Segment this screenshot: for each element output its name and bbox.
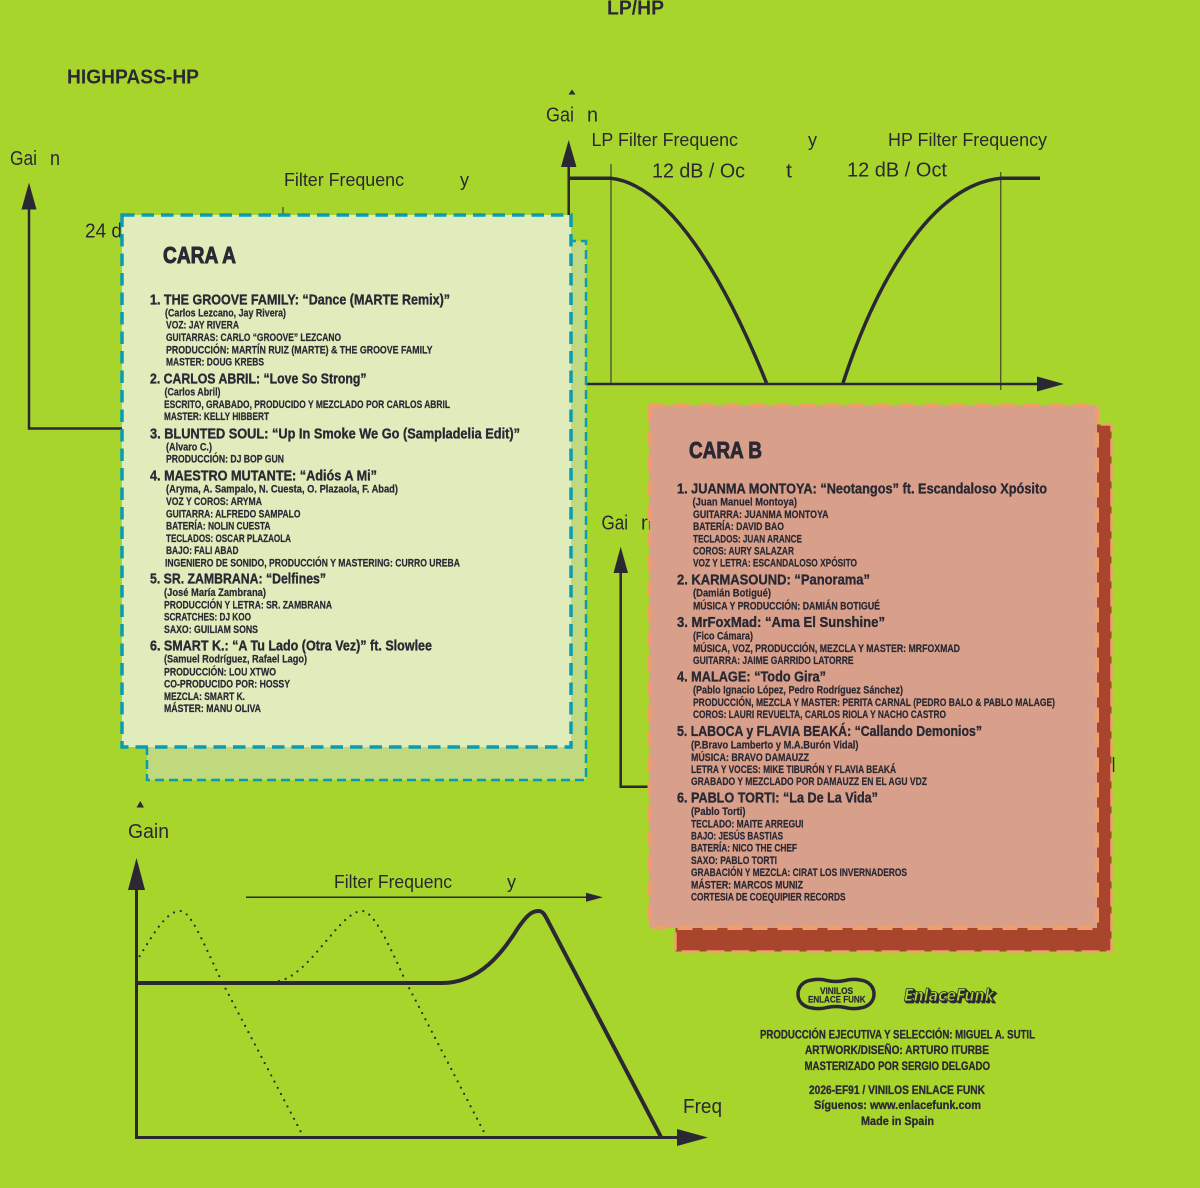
heading: Cara A: CARA A [163, 242, 236, 268]
heading: Cara B: CARA B [689, 437, 762, 463]
track A1: MASTER: DOUG KREBS [166, 356, 264, 368]
track B6 [677, 790, 907, 903]
track A6: MÁSTER: MANU OLIVA [164, 702, 261, 715]
track A1: VOZ: JAY RIVERA [166, 319, 239, 331]
track B2: MÚSICA Y PRODUCCIÓN: DAMIÁN BOTIGUÉ [693, 599, 880, 612]
track A6: PRODUCCIÓN: LOU XTWO [164, 665, 276, 678]
label: filter frequency [284, 170, 469, 190]
chart: third filter behind Cara B [602, 512, 1114, 787]
arrow: highpass y axis [22, 182, 125, 428]
track A5: (José María Zambrana) [164, 587, 266, 599]
label: filter frequency: Filter Frequenc [284, 170, 404, 190]
track B1: GUITARRA: JUANMA MONTOYA [693, 509, 829, 521]
track B6: BAJO: JESÚS BASTIAS [691, 829, 783, 842]
track A5: SCRATCHES: DJ KOO [164, 611, 251, 623]
track A6: 6. SMART K.: “A Tu Lado (Otra Vez)” ft. Slowlee [150, 638, 432, 654]
track A1 [150, 292, 450, 368]
track A3: PRODUCCIÓN: DJ BOP GUN [166, 452, 284, 465]
curve: highpass response [843, 178, 1040, 383]
track A2: (Carlos Abril) [164, 386, 221, 398]
y axis label: Gain: n [50, 148, 60, 170]
label: Freq: Freq [683, 1096, 722, 1118]
track B4: 4. MALAGE: “Todo Gira” [677, 669, 826, 685]
track A6 [150, 638, 432, 715]
credits [760, 1026, 1035, 1073]
track A1: (Carlos Lezcano, Jay Rivera) [165, 307, 286, 319]
track B4: COROS: LAURI REVUELTA, CARLOS RIOLA Y NACHO CASTRO [693, 709, 946, 721]
track B5: 5. LABOCA y FLAVIA BEAKÁ: “Callando Demonios” [677, 723, 982, 740]
track B1: COROS: AURY SALAZAR [693, 545, 794, 557]
label: filter frequency: y [507, 872, 516, 892]
arrow: resonant y axis [128, 858, 145, 1138]
logo: Vinilos Enlace Funk: ENLACE FUNK [808, 994, 866, 1004]
catalogue info: 2026-EF91 / VINILOS ENLACE FUNK [809, 1083, 985, 1097]
track B3: GUITARRA: JAIME GARRIDO LATORRE [693, 655, 854, 667]
y axis label: Gain: Gai [546, 104, 574, 126]
y axis label: Gain [546, 104, 598, 126]
track A4: (Aryma, A. Sampalo, N. Cuesta, O. Plazaola, F. Abad) [166, 483, 398, 495]
track B6: BATERÍA: NICO THE CHEF [691, 841, 797, 854]
track B2: 2. KARMASOUND: “Panorama” [677, 572, 870, 588]
icon: small triangle [136, 801, 144, 808]
track B6: (Pablo Torti) [691, 806, 746, 818]
track B3: 3. MrFoxMad: “Ama El Sunshine” [677, 615, 885, 631]
track B5: (P.Bravo Lamberto y M.A.Burón Vidal) [691, 739, 859, 751]
label: LP slope [652, 161, 792, 183]
panel: Cara B shadow [676, 424, 1112, 952]
track A3: 3. BLUNTED SOUL: “Up In Smoke We Go (Sampladelia Edit)” [150, 426, 520, 442]
track B6: GRABACIÓN Y MEZCLA: CIRAT LOS INVERNADEROS [691, 866, 907, 879]
y axis label: Gain: n [587, 104, 598, 126]
track B1: TECLADOS: JUAN ARANCE [693, 533, 802, 545]
y axis label: Gain: Gai [602, 512, 628, 534]
track A1: PRODUCCIÓN: MARTÍN RUIZ (MARTE) & THE GROOVE FAMILY [166, 343, 433, 356]
arrow: resonant x axis [135, 1129, 708, 1146]
track B4: PRODUCCIÓN, MEZCLA Y MASTER: PERITA CARNAL (PEDRO BALO & PABLO MALAGE) [693, 696, 1055, 709]
track A4: GUITARRA: ALFREDO SAMPALO [166, 508, 301, 520]
credits: ARTWORK/DISEÑO: ARTURO ITURBE [805, 1042, 989, 1057]
label: LP filter frequency [592, 130, 817, 150]
track A5: 5. SR. ZAMBRANA: “Delfines” [150, 571, 326, 587]
track A6: (Samuel Rodríguez, Rafael Lago) [164, 653, 307, 665]
curve: resonant response [136, 911, 661, 1137]
track B5: MÚSICA: BRAVO DAMAUZZ [691, 751, 809, 764]
track A2 [150, 371, 450, 423]
label: LP filter frequency: LP Filter Frequenc [592, 130, 738, 150]
arrow: LP/HP x axis [569, 376, 1064, 392]
curve: swept response 1 (dotted) [136, 911, 302, 1134]
track B6: TECLADO: MAITE ARREGUI [691, 818, 804, 830]
track B5 [677, 723, 982, 788]
credits: MASTERIZADO POR SERGIO DELGADO [804, 1059, 990, 1073]
label: filter frequency: y [460, 170, 469, 190]
y axis label: Gain [602, 512, 652, 534]
track A4 [150, 468, 460, 569]
label: filter frequency [334, 872, 516, 892]
logo: Enlace Funk script: EnlaceFunk [904, 986, 995, 1006]
track A4: BATERÍA: NOLIN CUESTA [166, 519, 271, 532]
curve: lowpass response [569, 178, 766, 383]
label: HP filter frequency: HP Filter Frequency [888, 130, 1047, 150]
label: LP slope: t [786, 161, 792, 183]
track B6: MÁSTER: MARCOS MUNIZ [691, 878, 803, 891]
chart: LP/HP filter [546, 90, 1064, 392]
label: filter frequency: Filter Frequenc [334, 872, 452, 892]
catalogue info [809, 1083, 985, 1128]
y axis label: Gain: Gai [10, 148, 37, 170]
track B4 [677, 669, 1055, 721]
track A2: ESCRITO, GRABADO, PRODUCIDO Y MEZCLADO POR CARLOS ABRIL [164, 399, 450, 411]
track B1: BATERÍA: DAVID BAO [693, 520, 784, 533]
track B5: GRABADO Y MEZCLADO POR DAMAUZZ EN EL AGU VDZ [691, 776, 927, 788]
track B6: CORTESIA DE COEQUIPIER RECORDS [691, 891, 846, 903]
y axis label: Gain: Gain [128, 821, 169, 843]
arrow: frequency sweep [246, 893, 603, 902]
track A3 [150, 426, 520, 465]
label: 24 dB: 24 d [85, 220, 122, 242]
track B1: 1. JUANMA MONTOYA: “Neotangos” ft. Escandaloso Xpósito [677, 481, 1047, 497]
track A4: VOZ Y COROS: ARYMA [166, 496, 262, 508]
track B6: SAXO: PABLO TORTI [691, 855, 777, 867]
track B3: MÚSICA, VOZ, PRODUCCIÓN, MEZCLA Y MASTER: MRFOXMAD [693, 642, 960, 655]
icon: small triangle [568, 90, 576, 94]
logo: Vinilos Enlace Funk [798, 979, 874, 1009]
chart: resonant lowpass filter [128, 801, 722, 1146]
track B4: (Pablo Ignacio López, Pedro Rodríguez Sánchez) [693, 684, 903, 696]
arrow: third chart axes [614, 547, 650, 787]
track A5: PRODUCCIÓN Y LETRA: SR. ZAMBRANA [164, 598, 332, 611]
logo: Vinilos Enlace Funk: VINILOS [820, 986, 853, 996]
title: HIGHPASS-HP: HIGHPASS-HP [67, 66, 199, 88]
track A6: MEZCLA: SMART K. [164, 691, 245, 703]
curve: swept response 2 (dotted) [279, 911, 485, 1134]
track A4: INGENIERO DE SONIDO, PRODUCCIÓN Y MASTERING: CURRO UREBA [165, 556, 460, 569]
track A6: CO-PRODUCIDO POR: HOSSY [164, 678, 291, 690]
panel: Cara A [122, 215, 571, 747]
track A4: BAJO: FALI ABAD [166, 545, 239, 557]
chart: highpass filter [10, 148, 469, 428]
label: LP slope: 12 dB / Oc [652, 161, 745, 183]
track B1 [677, 481, 1047, 569]
track A4: TECLADOS: OSCAR PLAZAOLA [166, 533, 291, 545]
arrow: LP/HP y axis [561, 140, 576, 384]
track B1: (Juan Manuel Montoya) [692, 496, 797, 508]
track A4: 4. MAESTRO MUTANTE: “Adiós A Mi” [150, 468, 377, 484]
label: HP slope: 12 dB / Oct [847, 160, 947, 182]
track A1: 1. THE GROOVE FAMILY: “Dance (MARTE Remix)” [150, 292, 450, 308]
track A1: GUITARRAS: CARLO “GROOVE” LEZCANO [166, 332, 341, 344]
track A3: (Alvaro C.) [166, 441, 212, 453]
track A2: 2. CARLOS ABRIL: “Love So Strong” [150, 371, 366, 387]
track A5 [150, 571, 332, 636]
track B3: (Fico Cámara) [693, 630, 753, 642]
credits: PRODUCCIÓN EJECUTIVA Y SELECCIÓN: MIGUEL A. SUTIL [760, 1026, 1035, 1042]
track B2 [677, 572, 880, 612]
track B3 [677, 615, 960, 667]
track B6: 6. PABLO TORTI: “La De La Vida” [677, 790, 878, 806]
y axis label: Gain: n [641, 512, 652, 534]
track A5: SAXO: GUILIAM SONS [164, 624, 258, 636]
panel: Cara A shadow [147, 241, 586, 780]
panel: Cara B [650, 405, 1097, 928]
y axis label: Gain [10, 148, 60, 170]
track B5: LETRA Y VOCES: MIKE TIBURÓN Y FLAVIA BEAKÁ [691, 763, 896, 776]
catalogue info: Made in Spain [861, 1114, 934, 1128]
track A2: MASTER: KELLY HIBBERT [164, 411, 269, 423]
track B2: (Damián Botigué) [693, 587, 771, 599]
catalogue info: Síguenos: www.enlacefunk.com [814, 1098, 981, 1112]
track B1: VOZ Y LETRA: ESCANDALOSO XPÓSITO [693, 556, 857, 569]
label: LP filter frequency: y [808, 130, 817, 150]
